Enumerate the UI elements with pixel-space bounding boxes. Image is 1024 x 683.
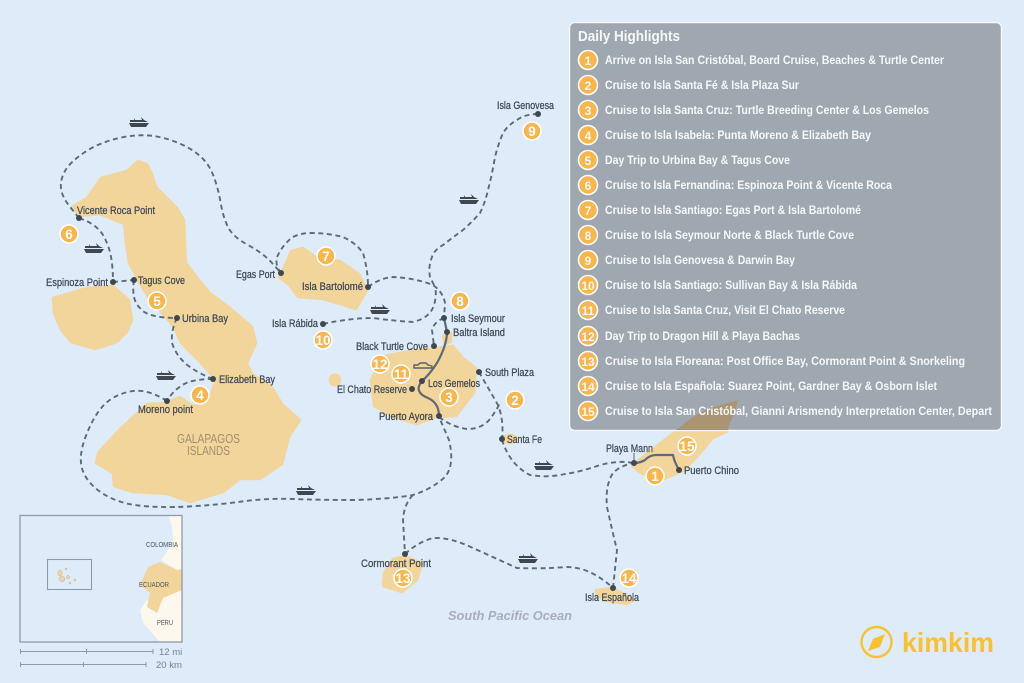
- map labels: Moreno point: [138, 404, 193, 416]
- list of days: 7: [585, 204, 592, 218]
- list of days: 15: [581, 405, 595, 419]
- island: Espanola: [596, 588, 634, 604]
- map number badges: 14: [621, 571, 637, 586]
- island: Santa Fe: [503, 435, 517, 443]
- list of days: Cruise to Isla Santa Cruz, Visit El Chato Reserve: [605, 303, 845, 317]
- map labels: Puerto Ayora: [379, 411, 434, 423]
- list of days: Cruise to Isla Isabela: Punta Moreno & Elizabeth Bay: [605, 128, 871, 142]
- list of days: Cruise to Isla Española: Suarez Point, Gardner Bay & Osborn Islet: [605, 379, 937, 393]
- map number badges: 4: [196, 388, 204, 403]
- ocean label: South Pacific Ocean: [448, 608, 572, 623]
- location dots: [76, 111, 682, 591]
- list of days: 8: [585, 229, 592, 243]
- map labels: Cormorant Point: [361, 558, 431, 570]
- map number badges: 10: [315, 333, 331, 348]
- list of days: Day Trip to Dragon Hill & Playa Bachas: [605, 329, 800, 343]
- inset country labels: PERU: [157, 618, 173, 627]
- island name: Galapagos Islands: GALAPAGOS: [177, 431, 240, 446]
- scale bars: 12 mi: [159, 647, 182, 658]
- list of days: Day Trip to Urbina Bay & Tagus Cove: [605, 153, 790, 167]
- island: Santa Cruz: [371, 346, 476, 424]
- map labels: Santa Fe: [507, 434, 542, 446]
- map labels: Puerto Chino: [684, 465, 739, 477]
- map number badges: 11: [394, 367, 409, 382]
- list of days: Cruise to Isla Santa Fé & Isla Plaza Sur: [605, 78, 799, 92]
- list of days: Cruise to Isla Floreana: Post Office Bay, Cormorant Point & Snorkeling: [605, 354, 965, 368]
- logo: kimkim: kimkim: [902, 627, 994, 658]
- map number badges: [60, 122, 696, 587]
- list of days: 11: [582, 304, 595, 318]
- map labels: Isla Genovesa: [497, 100, 555, 112]
- inset country labels: ECUADOR: [139, 580, 169, 589]
- map labels: Espinoza Point: [46, 277, 108, 289]
- scale bars: [20, 647, 182, 671]
- island: Floreana: [383, 556, 422, 592]
- map labels: Isla Española: [585, 592, 640, 604]
- island name: Galapagos Islands: ISLANDS: [187, 443, 230, 458]
- map labels: Isla Rábida: [272, 318, 319, 330]
- island: Santiago: [279, 248, 367, 309]
- map labels: Isla Bartolomé: [302, 281, 363, 293]
- list of days: [578, 50, 992, 420]
- list of days: 9: [585, 254, 592, 268]
- list of days: Cruise to Isla Santiago: Egas Port & Isla Bartolomé: [605, 203, 861, 217]
- island: Fernandina: [53, 286, 132, 349]
- island name: Galapagos Islands: [177, 431, 240, 458]
- map labels: Vicente Roca Point: [77, 205, 155, 217]
- map labels: El Chato Reserve: [337, 384, 407, 396]
- list of days: Cruise to Isla San Cristóbal, Gianni Arismendy Interpretation Center, Depart: [605, 404, 992, 418]
- list of days: 5: [585, 154, 592, 168]
- list of days: 6: [585, 179, 592, 193]
- map labels: Los Gemelos: [428, 378, 480, 390]
- map labels: Urbina Bay: [182, 313, 228, 325]
- list of days: Cruise to Isla Seymour Norte & Black Turtle Cove: [605, 228, 854, 242]
- list of days: Arrive on Isla San Cristóbal, Board Cruise, Beaches & Turtle Center: [605, 53, 944, 67]
- map number badges: 5: [153, 294, 161, 309]
- island: Isabela: [72, 161, 300, 502]
- list of days: 2: [585, 79, 592, 93]
- list of days: 14: [581, 380, 595, 394]
- map labels: Black Turtle Cove: [356, 341, 428, 353]
- inset country labels: COLOMBIA: [146, 540, 178, 549]
- panel: Daily Highlights: [570, 22, 1002, 430]
- map labels: Elizabeth Bay: [219, 374, 275, 386]
- ship icons: [84, 117, 554, 563]
- list of days: 13: [581, 355, 595, 369]
- list of days: Cruise to Isla Santiago: Sullivan Bay & Isla Rábida: [605, 278, 857, 292]
- island: San Cristobal: [632, 431, 728, 482]
- map number badges: 8: [456, 294, 464, 309]
- map labels: Tagus Cove: [138, 275, 185, 287]
- map labels: Baltra Island: [453, 327, 505, 339]
- map number badges: 2: [511, 393, 519, 408]
- map number badges: 13: [395, 571, 411, 586]
- island: Pinzon: [330, 374, 340, 386]
- logo: kimkim: [862, 627, 994, 658]
- map number badges: 3: [445, 390, 453, 405]
- list of days: 1: [585, 54, 592, 68]
- map number badges: 12: [372, 357, 388, 372]
- list of days: Cruise to Isla Santa Cruz: Turtle Breeding Center & Los Gemelos: [605, 103, 929, 117]
- list of days: 4: [585, 129, 592, 143]
- map number badges: 1: [651, 469, 659, 484]
- map labels: [46, 100, 739, 604]
- list of days: Cruise to Isla Fernandina: Espinoza Point & Vicente Roca: [605, 178, 892, 192]
- map number badges: 15: [679, 439, 695, 454]
- map labels: Egas Port: [236, 269, 275, 281]
- list of days: 12: [581, 330, 595, 344]
- panel heading: Daily Highlights: [578, 29, 680, 45]
- scale bars: 20 km: [156, 660, 182, 671]
- inset locator map: [20, 515, 182, 642]
- list of days: 10: [581, 279, 595, 293]
- cruise routes: [61, 114, 633, 588]
- map number badges: 7: [322, 249, 330, 264]
- inset country labels: [139, 540, 178, 627]
- map labels: South Plaza: [485, 367, 535, 379]
- map number badges: 9: [528, 124, 536, 139]
- map number badges: 6: [65, 227, 73, 242]
- island: Baltra: [443, 333, 451, 344]
- icon: car: [414, 363, 432, 368]
- driving roads: [419, 318, 679, 470]
- list of days: 3: [585, 104, 592, 118]
- map labels: Playa Mann: [606, 443, 653, 455]
- list of days: Cruise to Isla Genovesa & Darwin Bay: [605, 253, 795, 267]
- map labels: Isla Seymour: [451, 313, 505, 325]
